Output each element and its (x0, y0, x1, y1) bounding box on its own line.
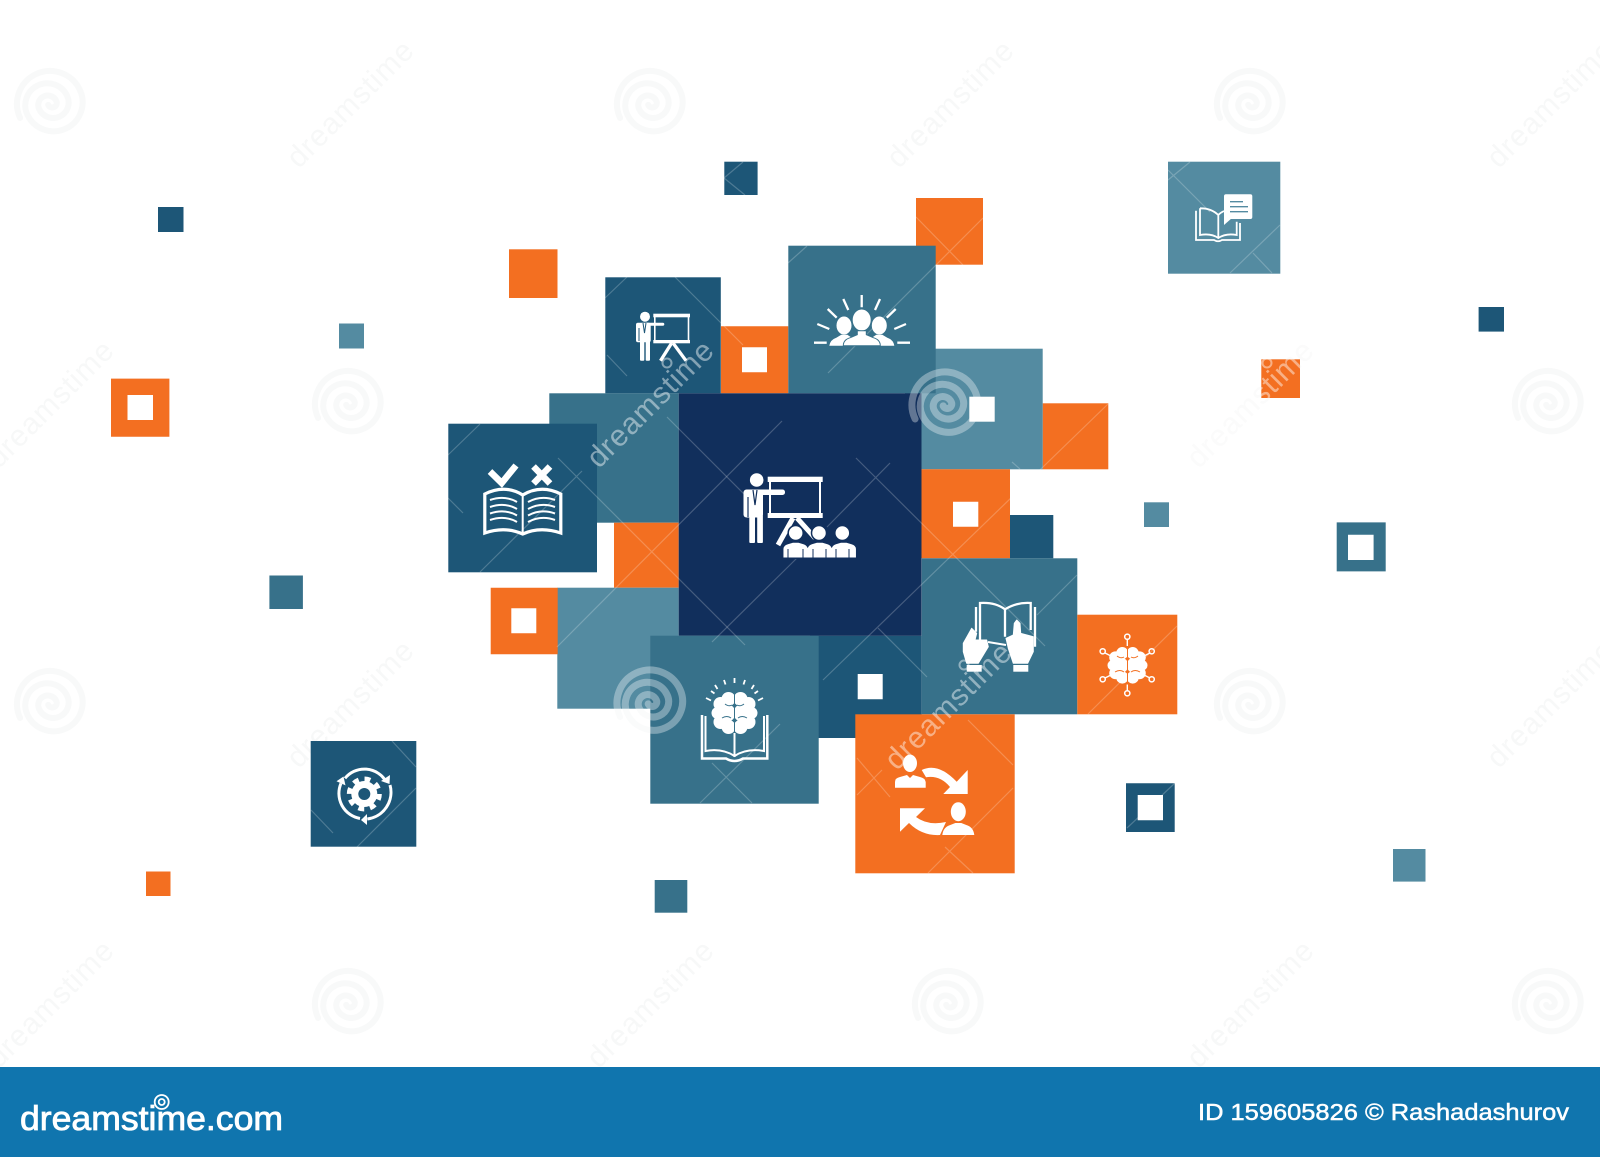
icon: group with rays (814, 295, 910, 346)
panel: book with check and cross (448, 424, 597, 572)
watermark lines over tiles (311, 162, 1280, 873)
icon: central presenter with audience (744, 473, 857, 558)
panel: hands holding book (922, 558, 1077, 714)
panel: group with rays (788, 246, 936, 393)
icon: people exchanging with arrows (895, 755, 974, 835)
panel: brain in book (650, 636, 819, 804)
cluster background tiles (491, 198, 1108, 738)
panel: book with chat bubble (1168, 162, 1280, 274)
watermark pattern on white: dreamstime (280, 634, 420, 774)
icon: small presenter at board (636, 312, 690, 361)
icon: open book with check and cross (485, 466, 561, 534)
scattered small squares (146, 162, 1504, 913)
panel: presenter small (605, 277, 721, 393)
watermark pattern on white: dreamstime (280, 34, 420, 174)
watermark over tiles (580, 334, 1320, 776)
panel: central presenter (679, 393, 922, 636)
panel: knowledge exchange (855, 714, 1015, 873)
watermark over tiles: dreamstime (1180, 334, 1320, 474)
watermark pattern on white: dreamstime (1180, 934, 1320, 1074)
watermark over tiles: dreamstime (580, 334, 720, 474)
icon: brain with nodes (1100, 634, 1154, 696)
watermark pattern on white: dreamstime (580, 934, 720, 1074)
footer image id and credit: ID 159605826 © Rashadashurov (1198, 1099, 1570, 1125)
hollow square: dark lower right (1126, 783, 1175, 832)
footer logo spiral (155, 1095, 169, 1109)
hollow square: orange far left (111, 379, 169, 437)
panel: gear cycle (311, 741, 416, 847)
footer logo text: dreamstime.com (20, 1100, 283, 1138)
footer bar (0, 1067, 1600, 1157)
watermark pattern on white: dreamstime (1180, 334, 1320, 474)
watermark over tiles: dreamstime (878, 636, 1018, 776)
icon: book with chat bubble (1196, 194, 1252, 241)
panel: orange brain (1077, 615, 1177, 714)
icon: hands holding open book (963, 603, 1035, 672)
watermark pattern on white: dreamstime (880, 34, 1020, 174)
icon: brain in open book (702, 678, 767, 761)
icon: gear with cycle arrows (336, 769, 391, 825)
hollow square: teal right (1337, 522, 1386, 571)
